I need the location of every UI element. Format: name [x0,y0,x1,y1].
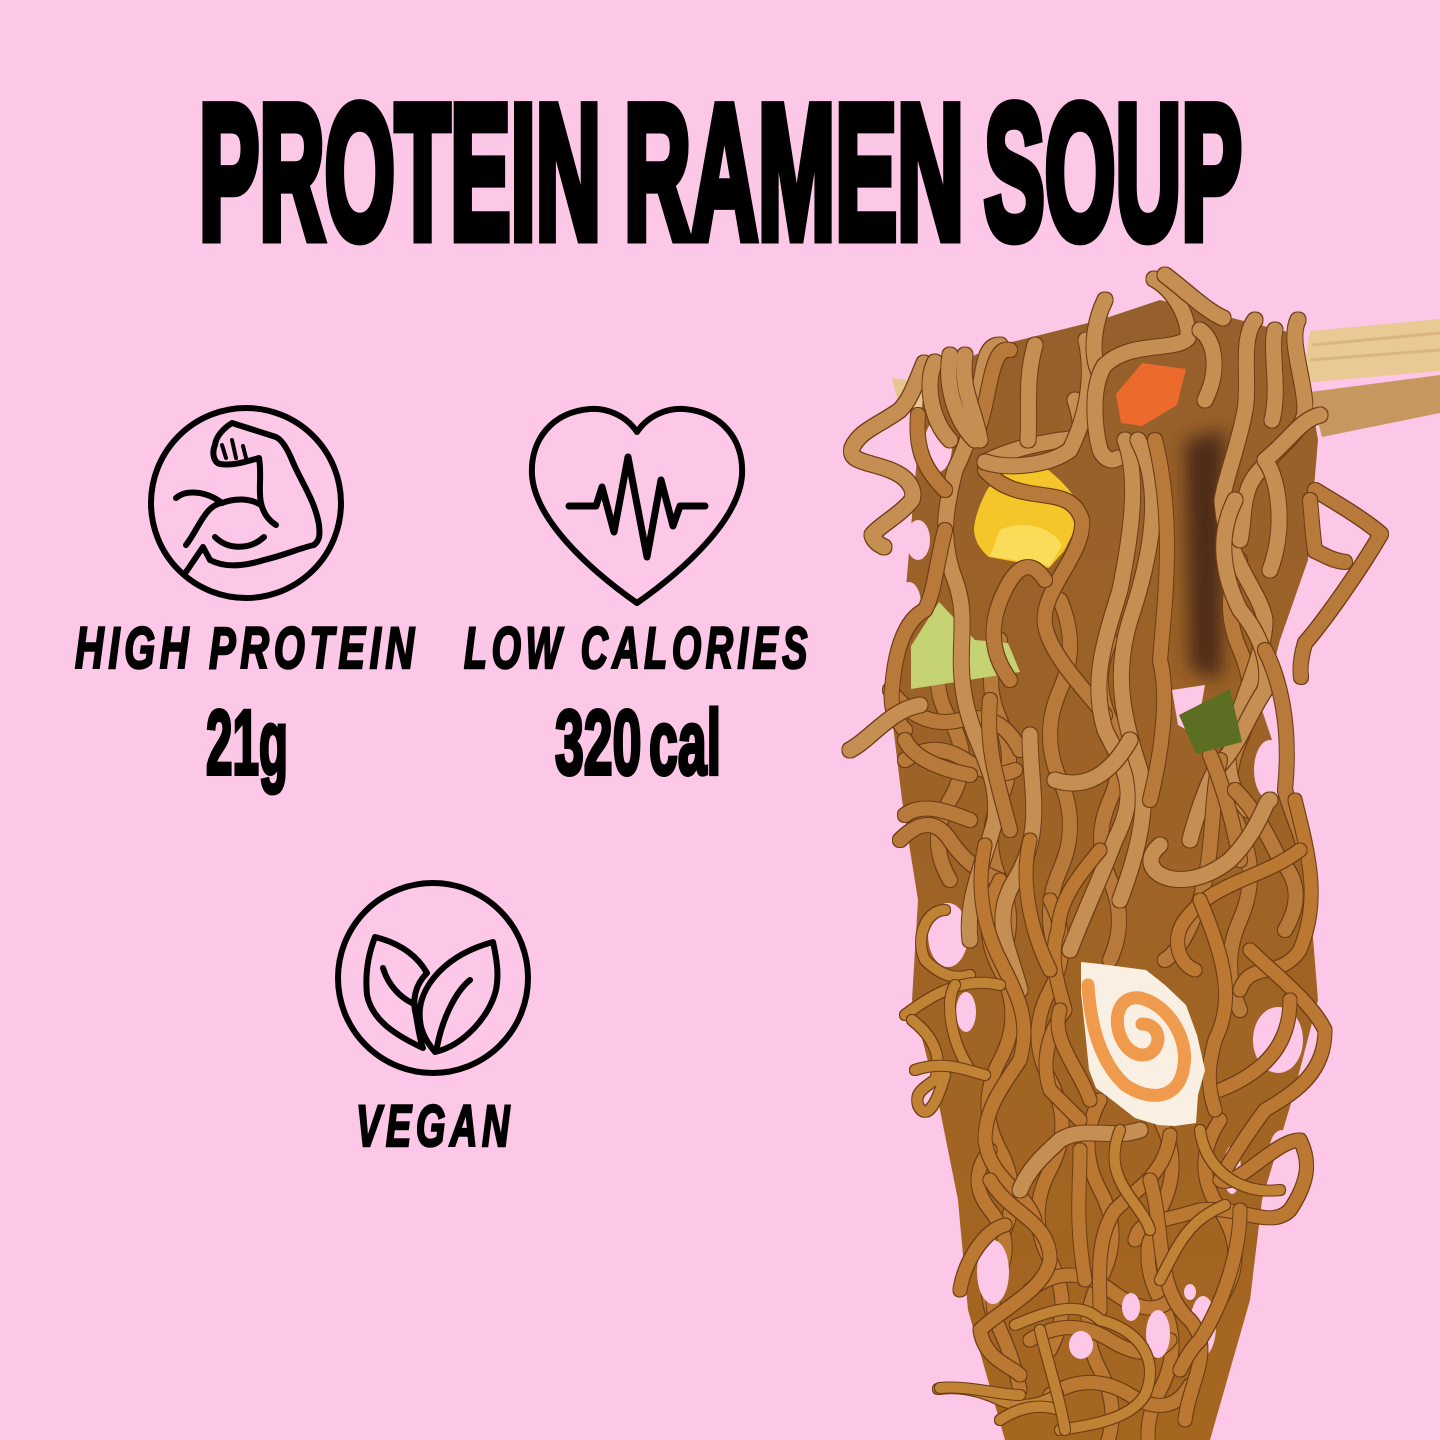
fish cake [1081,962,1205,1126]
title: RAMEN [624,66,964,279]
pink gaps between noodles [897,420,1303,1359]
panel: low calories [464,409,812,794]
label: low calories: LOW CALORIES [464,616,812,681]
zucchini [1179,689,1242,754]
dark shadow pocket [1185,430,1225,680]
back noodles [890,560,1250,1440]
icon: leaves [338,883,528,1073]
mid noodles [850,275,1381,940]
noodle mass [890,300,1318,1440]
corn, cabbage [911,463,1083,689]
panel: high protein [75,408,419,794]
label: high protein: HIGH PROTEIN [75,616,419,681]
icon: heart with pulse [532,409,742,603]
chopsticks [892,319,1440,437]
front noodles [905,440,1325,1240]
value: 21g: 21g [206,692,288,794]
title: PROTEIN [199,66,601,279]
value: 320 cal: 320 cal [555,692,721,794]
photo: noodles on chopsticks [850,275,1440,1440]
lower front noodles [940,1010,1280,1430]
icon: flexed arm [151,408,341,598]
panel: vegan [338,883,528,1159]
carrot [1116,363,1186,426]
label: vegan: VEGAN [356,1094,514,1159]
